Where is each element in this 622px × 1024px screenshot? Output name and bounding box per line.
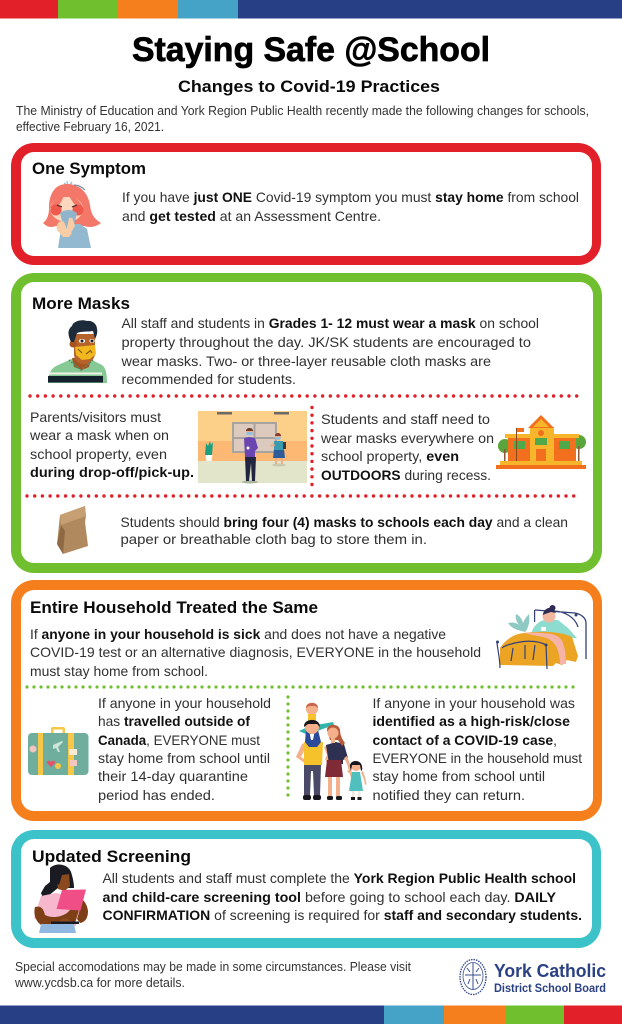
- footer note: Special accomodations may be made in some circumstances. Please visit: [15, 960, 412, 974]
- text: students outdoors: school property, even: [321, 448, 459, 464]
- intro text: [16, 104, 589, 134]
- panel: updated screening: [11, 830, 601, 948]
- title: Staying Safe @School: [132, 31, 490, 69]
- text: travelled: [98, 695, 271, 803]
- text: students outdoors: Students and staff need to: [321, 411, 490, 427]
- text: screening: All students and staff must complete the York Region Public Health school: [102, 870, 576, 886]
- intro text: effective February 16, 2021.: [16, 120, 164, 134]
- heading: entire household: Entire Household Treated the Same: [30, 598, 318, 617]
- heading: more masks: More Masks: [32, 294, 130, 313]
- text: staff and students masks: [120, 315, 539, 387]
- text: screening: and child-care screening tool before going to school each day. DAILY: [102, 889, 557, 905]
- text: four masks: Students should bring four (4) masks to schools each day and a clean: [120, 514, 568, 530]
- icon: school building: [496, 415, 586, 469]
- icon: person in bed: [496, 605, 586, 669]
- text: household sick: must stay home from school.: [30, 663, 208, 679]
- text: high-risk contact: identified as a high-risk/close: [372, 713, 570, 729]
- text: staff and students masks: All staff and students in Grades 1- 12 must wear a mask on school: [122, 315, 539, 331]
- panel: more masks: [11, 273, 602, 573]
- text: parents and visitors: wear a mask when on: [29, 427, 169, 443]
- text: high-risk contact: If anyone in your household was: [372, 695, 575, 711]
- text: high-risk contact: stay home from school until: [372, 768, 545, 784]
- footer note: [14, 960, 412, 990]
- subtitle: Changes to Covid-19 Practices: [178, 77, 440, 96]
- bottom colour bar: [0, 1006, 622, 1024]
- text: parents and visitors: [29, 409, 194, 480]
- heading: one symptom: One Symptom: [32, 159, 146, 178]
- intro text: The Ministry of Education and York Region Public Health recently made the following changes for schools,: [16, 104, 589, 118]
- text: students outdoors: [320, 411, 494, 483]
- icon: paper bag: [57, 506, 88, 554]
- text: parents and visitors: during drop-off/pick-up.: [30, 464, 194, 480]
- icon: girl coughing: [43, 181, 101, 248]
- text: staff and students masks: recommended for students.: [122, 371, 296, 387]
- text: four masks: [120, 514, 568, 547]
- panel: one symptom: [11, 143, 601, 265]
- text: household sick: If anyone in your household is sick and does not have a negative: [30, 626, 446, 642]
- icon: man with mask: [48, 320, 107, 383]
- icon: crest: [460, 960, 486, 994]
- text: parents and visitors: Parents/visitors must: [30, 409, 161, 425]
- text: travelled: If anyone in your household: [98, 695, 271, 711]
- text: four masks: paper or breathable cloth bag to store them in.: [120, 531, 427, 547]
- text: high-risk contact: contact of a COVID-19 case,: [372, 732, 557, 748]
- text: high-risk contact: [372, 695, 582, 803]
- text: travelled: period has ended.: [98, 787, 215, 803]
- text: students outdoors: OUTDOORS during recess.: [321, 467, 491, 483]
- text: one symptom: and get tested at an Assessment Centre.: [122, 208, 381, 224]
- heading: updated screening: Updated Screening: [32, 847, 191, 866]
- footer note: www.ycdsb.ca for more details.: [14, 976, 185, 990]
- text: one symptom: If you have just ONE Covid-19 symptom you must stay home from school: [122, 189, 579, 205]
- icon: woman with tablet: [34, 865, 88, 933]
- text: travelled: their 14-day quarantine: [98, 768, 248, 784]
- text: household sick: [30, 626, 481, 679]
- text: students outdoors: wear masks everywhere on: [320, 430, 494, 446]
- text: staff and students masks: wear masks. Two- or three-layer reusable cloth masks are: [120, 353, 491, 369]
- text: travelled: has travelled outside of: [98, 713, 250, 729]
- text: high-risk contact: EVERYONE in the household must: [372, 750, 582, 766]
- text: household sick: COVID-19 test or an alternative diagnosis, EVERYONE in the household: [30, 644, 481, 660]
- icon: family: [296, 703, 366, 800]
- illustration: school hallway: [198, 411, 307, 484]
- logo: York Catholic District School Board: District School Board: [494, 983, 606, 995]
- panel: entire household: [11, 580, 602, 821]
- text: travelled: Canada, EVERYONE must: [98, 732, 260, 748]
- text: one symptom: [122, 189, 579, 224]
- text: screening: [102, 870, 582, 923]
- top colour bar: [0, 0, 622, 18]
- logo: York Catholic District School Board: York Catholic: [494, 961, 606, 981]
- text: staff and students masks: property throughout the day. JK/SK students are encouraged to: [122, 334, 531, 350]
- text: high-risk contact: notified they can return.: [372, 787, 525, 803]
- logo: York Catholic District School Board: [460, 960, 606, 995]
- text: parents and visitors: school property, even: [30, 446, 167, 462]
- text: travelled: stay home from school until: [98, 750, 270, 766]
- icon: suitcase: [28, 727, 88, 775]
- text: screening: CONFIRMATION of screening is required for staff and secondary students.: [102, 907, 582, 923]
